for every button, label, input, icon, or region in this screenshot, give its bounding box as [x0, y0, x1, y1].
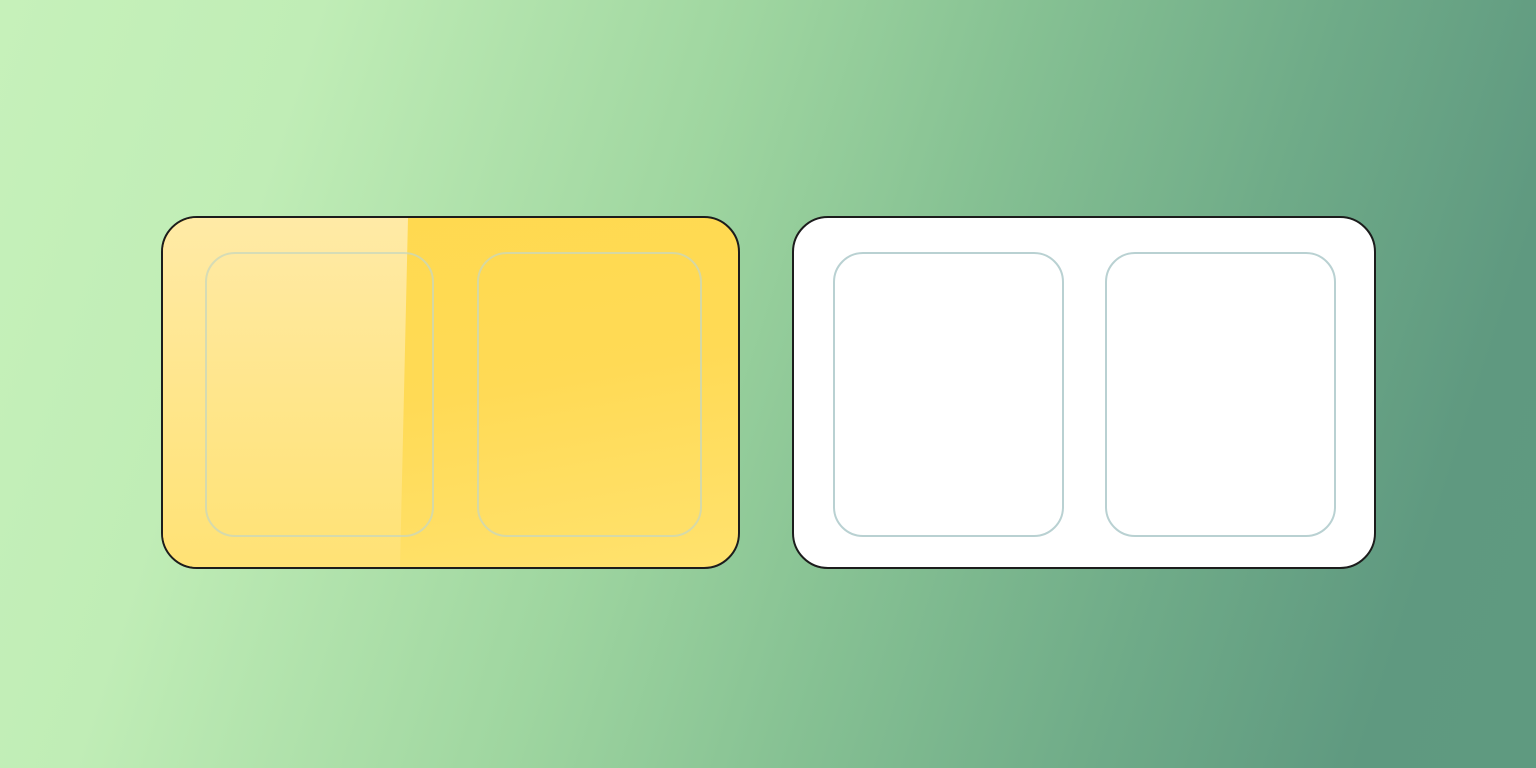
inner box: left — [833, 252, 1064, 537]
panel: yellow card — [161, 216, 740, 569]
inner box: right — [477, 252, 702, 537]
panel: white card — [792, 216, 1376, 569]
inner box: left — [205, 252, 434, 537]
gloss highlight — [163, 218, 408, 567]
inner box: right — [1105, 252, 1336, 537]
